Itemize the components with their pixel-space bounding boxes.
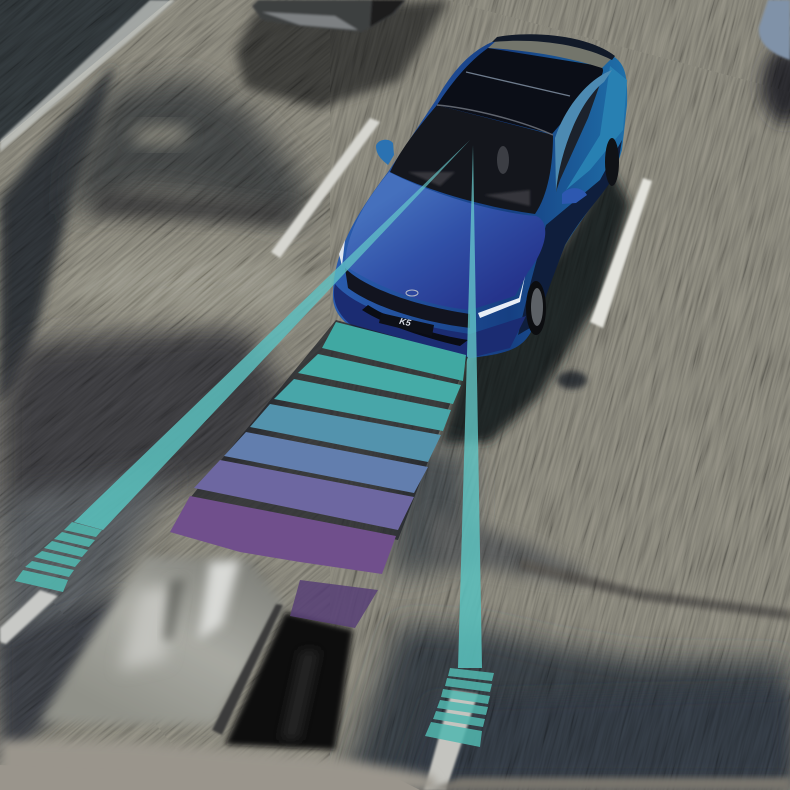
windshield top edge — [437, 105, 553, 135]
centre dark road patch — [390, 440, 470, 580]
rear spoiler strip — [492, 34, 615, 60]
lower right shaded road — [340, 625, 790, 790]
blurred passing car foreground — [40, 556, 353, 750]
beam: left lane sensor — [74, 140, 470, 530]
crack line — [520, 558, 790, 620]
lane marking: lower left dash — [0, 590, 58, 644]
lower intake — [362, 305, 468, 346]
top left verge — [0, 0, 170, 142]
dark car side — [225, 612, 353, 750]
roof line — [466, 72, 570, 96]
distant car top — [252, 0, 406, 32]
lower bumper — [334, 284, 526, 358]
lane marking: right dashed line — [590, 178, 652, 328]
front grille — [345, 268, 470, 328]
side trim highlight — [566, 66, 627, 190]
headlight right — [478, 276, 525, 318]
shadow of distant car — [236, 0, 450, 108]
tree shadow column — [0, 64, 115, 402]
licence plate — [379, 313, 434, 336]
tree shadow lower — [0, 325, 290, 520]
road edge stripe top left — [0, 0, 176, 152]
lane marking: bottom dash — [424, 690, 478, 790]
distant car top right — [759, 0, 790, 60]
light patch — [60, 255, 320, 315]
band gaps — [190, 320, 468, 540]
rear roof reflection — [488, 38, 612, 68]
licence plate: K5 — [399, 316, 413, 328]
shadow of main car — [440, 165, 630, 445]
beam: right lane sensor — [458, 145, 482, 668]
dashboard reflection — [408, 172, 530, 206]
side window pillar — [555, 70, 612, 192]
rear wheel — [605, 138, 619, 186]
right lane grid — [425, 668, 494, 747]
car — [333, 34, 627, 358]
right mirror — [562, 188, 587, 204]
lane marking: left dashed line — [271, 118, 380, 258]
driver silhouette — [497, 146, 509, 174]
left lane grid — [15, 522, 102, 592]
hood — [345, 172, 545, 310]
badge — [406, 290, 418, 296]
side windows — [556, 84, 600, 192]
tree shadow upper — [70, 78, 312, 226]
foreground concrete barrier — [0, 740, 790, 790]
left mirror — [376, 140, 394, 165]
windshield — [390, 105, 553, 214]
roof — [437, 48, 603, 134]
dark lower door — [518, 140, 622, 335]
car body — [333, 38, 627, 358]
headlight left — [339, 240, 345, 266]
lower left road tone — [0, 470, 170, 720]
wheel — [526, 281, 546, 335]
forward collision sensing bands — [170, 320, 468, 628]
